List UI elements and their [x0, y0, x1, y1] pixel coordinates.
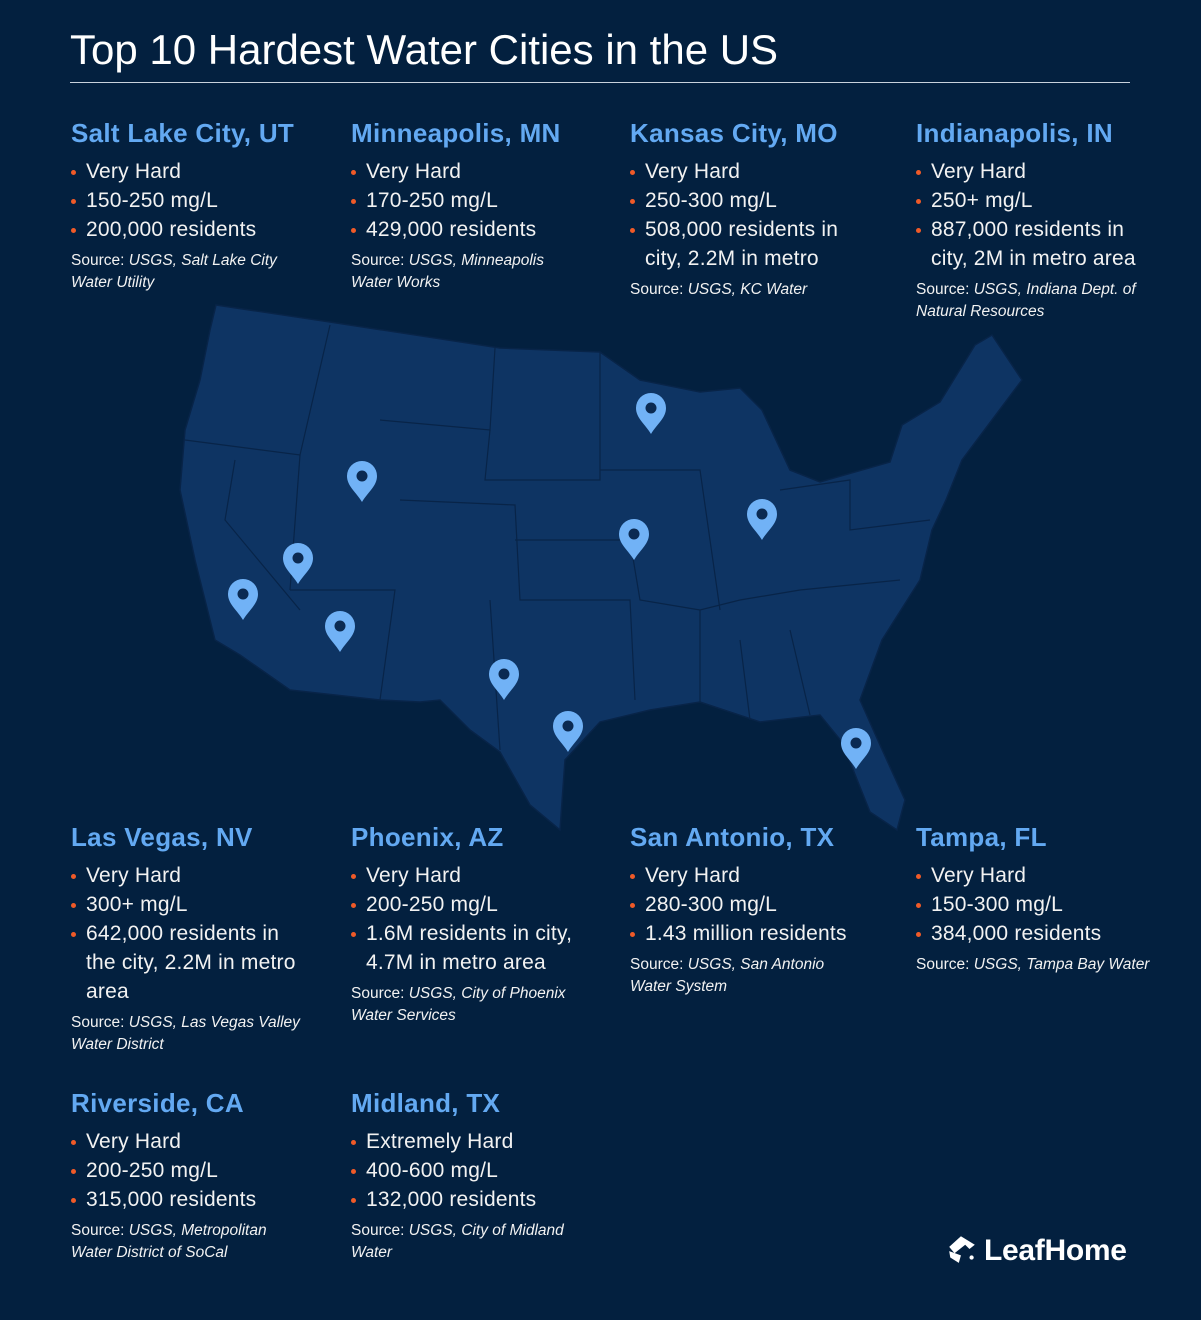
- panel: Salt Lake City: Very Hard: [86, 160, 181, 183]
- panel: Salt Lake City: Source: USGS, Salt Lake City Water Utility: [71, 252, 277, 291]
- panel: Salt Lake City: Salt Lake City, UT: [71, 118, 294, 148]
- panel: Kansas City: 250-300 mg/L: [645, 189, 777, 212]
- panel: San Antonio: Very Hard: [645, 864, 740, 887]
- panel: Phoenix: 1.6M residents in city, 4.7M in metro area: [366, 922, 572, 974]
- panel: Indianapolis: Indianapolis, IN: [916, 118, 1113, 148]
- logo: LeafHome: [984, 1234, 1127, 1267]
- panel: Kansas City: Source: USGS, KC Water: [630, 281, 807, 298]
- panel: Midland: 132,000 residents: [366, 1188, 536, 1211]
- panel: Las Vegas: [71, 822, 301, 1053]
- panel: Riverside: 315,000 residents: [86, 1188, 256, 1211]
- panel: Phoenix: 200-250 mg/L: [366, 893, 498, 916]
- panel: San Antonio: 280-300 mg/L: [645, 893, 777, 916]
- panel: San Antonio: Source: USGS, San Antonio Water System: [630, 956, 824, 995]
- panel: San Antonio: [630, 822, 847, 995]
- panel: Kansas City: 508,000 residents in city, 2.2M in metro: [645, 218, 838, 270]
- panel: Midland: [351, 1088, 564, 1261]
- panel: Tampa: 384,000 residents: [931, 922, 1101, 945]
- panel: Kansas City: Kansas City, MO: [630, 118, 838, 148]
- panel: Riverside: 200-250 mg/L: [86, 1159, 218, 1182]
- panel: Midland: Midland, TX: [351, 1088, 500, 1118]
- panel: Riverside: Source: USGS, Metropolitan Water District of SoCal: [71, 1222, 267, 1261]
- panel: Minneapolis: Source: USGS, Minneapolis Water Works: [351, 252, 544, 291]
- panel: Salt Lake City: 150-250 mg/L: [86, 189, 218, 212]
- panel: Kansas City: Very Hard: [645, 160, 740, 183]
- panel: Salt Lake City: 200,000 residents: [86, 218, 256, 241]
- panel: Minneapolis: Very Hard: [366, 160, 461, 183]
- panel: Las Vegas: Las Vegas, NV: [71, 822, 253, 852]
- panel: Midland: Source: USGS, City of Midland Water: [351, 1222, 564, 1261]
- panel: Las Vegas: 642,000 residents in the city, 2.2M in metro area: [86, 922, 296, 1003]
- panel: Minneapolis: [351, 118, 561, 291]
- panel: Tampa: 150-300 mg/L: [931, 893, 1063, 916]
- panel: Phoenix: Phoenix, AZ: [351, 822, 504, 852]
- panel: Tampa: [916, 822, 1150, 973]
- panel: Salt Lake City: [71, 118, 294, 291]
- panel: Phoenix: Source: USGS, City of Phoenix Water Services: [351, 985, 566, 1024]
- panel: Midland: Extremely Hard: [366, 1130, 514, 1153]
- panel: Tampa: Tampa, FL: [916, 822, 1047, 852]
- panel: Indianapolis: Source: USGS, Indiana Dept. of Natural Resources: [916, 281, 1136, 320]
- panel: Las Vegas: Source: USGS, Las Vegas Valley Water District: [71, 1014, 300, 1053]
- panel: Midland: 400-600 mg/L: [366, 1159, 498, 1182]
- panel: Indianapolis: [916, 118, 1137, 320]
- panel: Las Vegas: 300+ mg/L: [86, 893, 188, 916]
- panel: Riverside: [71, 1088, 267, 1261]
- panel: Minneapolis: 429,000 residents: [366, 218, 536, 241]
- panel: Phoenix: [351, 822, 572, 1024]
- title: Top 10 Hardest Water Cities in the US: [70, 26, 778, 73]
- panel: Las Vegas: Very Hard: [86, 864, 181, 887]
- panel: Tampa: Source: USGS, Tampa Bay Water: [916, 956, 1149, 973]
- panel: Indianapolis: 250+ mg/L: [931, 189, 1033, 212]
- panel: San Antonio: San Antonio, TX: [630, 822, 834, 852]
- panel: Tampa: Very Hard: [931, 864, 1026, 887]
- panel: Minneapolis: 170-250 mg/L: [366, 189, 498, 212]
- panel: Kansas City: [630, 118, 838, 298]
- panel: Riverside: Very Hard: [86, 1130, 181, 1153]
- panel: Indianapolis: 887,000 residents in city, 2M in metro area: [931, 218, 1136, 270]
- panel: Riverside: Riverside, CA: [71, 1088, 244, 1118]
- panel: San Antonio: 1.43 million residents: [645, 922, 847, 945]
- panel: Phoenix: Very Hard: [366, 864, 461, 887]
- panel: Minneapolis: Minneapolis, MN: [351, 118, 561, 148]
- panel: Indianapolis: Very Hard: [931, 160, 1026, 183]
